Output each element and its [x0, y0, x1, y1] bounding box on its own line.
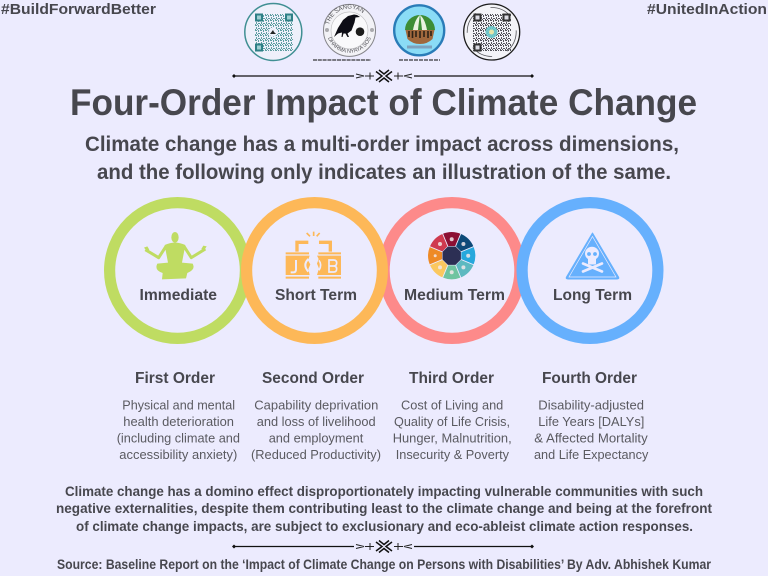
- summary paragraph: of climate change impacts, are subject to exclusionary and eco-ableist climate action responses.: [76, 519, 693, 534]
- logo: black QR badge: [464, 4, 520, 60]
- logo: The Sangyan Dharma Nyaya crow seal: DHARMA NYAYA SOS: [328, 36, 371, 53]
- icon: skull warning triangle: [566, 233, 619, 279]
- icon: meditating figure: [144, 232, 207, 279]
- summary paragraph: Climate change has a domino effect disproportionately impacting vulnerable communities with such: [65, 484, 703, 499]
- column: fourth order: Life Years [DALYs]: [538, 414, 644, 429]
- ring: long term: Long Term: [553, 287, 632, 304]
- column: third order: Insecurity & Poverty: [396, 447, 509, 462]
- ring: long term: [522, 203, 658, 338]
- column: fourth order: & Affected Mortality: [534, 431, 648, 446]
- ring: short term: [247, 203, 382, 338]
- column: second order: Capability deprivation: [254, 398, 378, 412]
- column: second order: Second Order: [262, 370, 364, 387]
- summary paragraph: negative externalities, despite them contributing least to the climate change and being at the forefront: [56, 501, 712, 516]
- ring: immediate: [110, 203, 245, 338]
- column: third order: Third Order: [409, 370, 494, 387]
- column: fourth order: Disability-adjusted: [538, 398, 644, 412]
- ring: immediate: Immediate: [140, 287, 217, 304]
- subtitle: [85, 133, 679, 184]
- subtitle: and the following only indicates an illustration of the same.: [97, 161, 671, 184]
- column: third order: [393, 370, 512, 462]
- logo: The Sangyan Dharma Nyaya crow seal: THE SANGYAN: [325, 4, 365, 24]
- column: third order: Quality of Life Crisis,: [394, 414, 510, 429]
- column: second order: and loss of livelihood: [257, 414, 376, 429]
- column: first order: health deterioration: [123, 414, 234, 429]
- icon: segmented wheel: [428, 232, 476, 280]
- column: first order: accessibility anxiety): [119, 447, 237, 462]
- column: third order: Hunger, Malnutrition,: [393, 431, 512, 446]
- column: fourth order: and Life Expectancy: [534, 447, 649, 462]
- column: second order: (Reduced Productivity): [251, 447, 381, 462]
- column: fourth order: Fourth Order: [542, 370, 637, 387]
- ring: medium term: Medium Term: [404, 287, 505, 304]
- column: third order: Cost of Living and: [401, 398, 503, 412]
- column: first order: Physical and mental: [122, 398, 235, 412]
- ring: medium term: [384, 203, 520, 338]
- column: fourth order: [534, 370, 649, 462]
- logo: The Sangyan Dharma Nyaya crow seal: [313, 4, 376, 61]
- column: first order: (including climate and: [117, 431, 240, 446]
- column: first order: First Order: [135, 370, 215, 387]
- summary paragraph: [56, 484, 712, 534]
- column: second order: and employment: [269, 431, 364, 446]
- hashtag: BuildForwardBetter: #BuildForwardBetter: [1, 1, 156, 18]
- logo: teal QR badge: [245, 4, 302, 60]
- source line: Source: Baseline Report on the ‘Impact of Climate Change on Persons with Disabilities’ By Adv. Abhishek Kumar: [57, 557, 712, 572]
- subtitle: Climate change has a multi-order impact across dimensions,: [85, 133, 679, 156]
- icon: broken job sign: [286, 232, 341, 279]
- column: first order: [117, 370, 240, 462]
- ring: short term: Short Term: [275, 287, 357, 304]
- bottom ornamental divider: [232, 540, 534, 552]
- logo: umbrella seal: [394, 5, 444, 60]
- top ornamental divider: [232, 70, 534, 82]
- title: Four-Order Impact of Climate Change: [70, 82, 697, 123]
- hashtag: UnitedInAction: #UnitedInAction: [647, 1, 767, 18]
- column: second order: [251, 370, 381, 462]
